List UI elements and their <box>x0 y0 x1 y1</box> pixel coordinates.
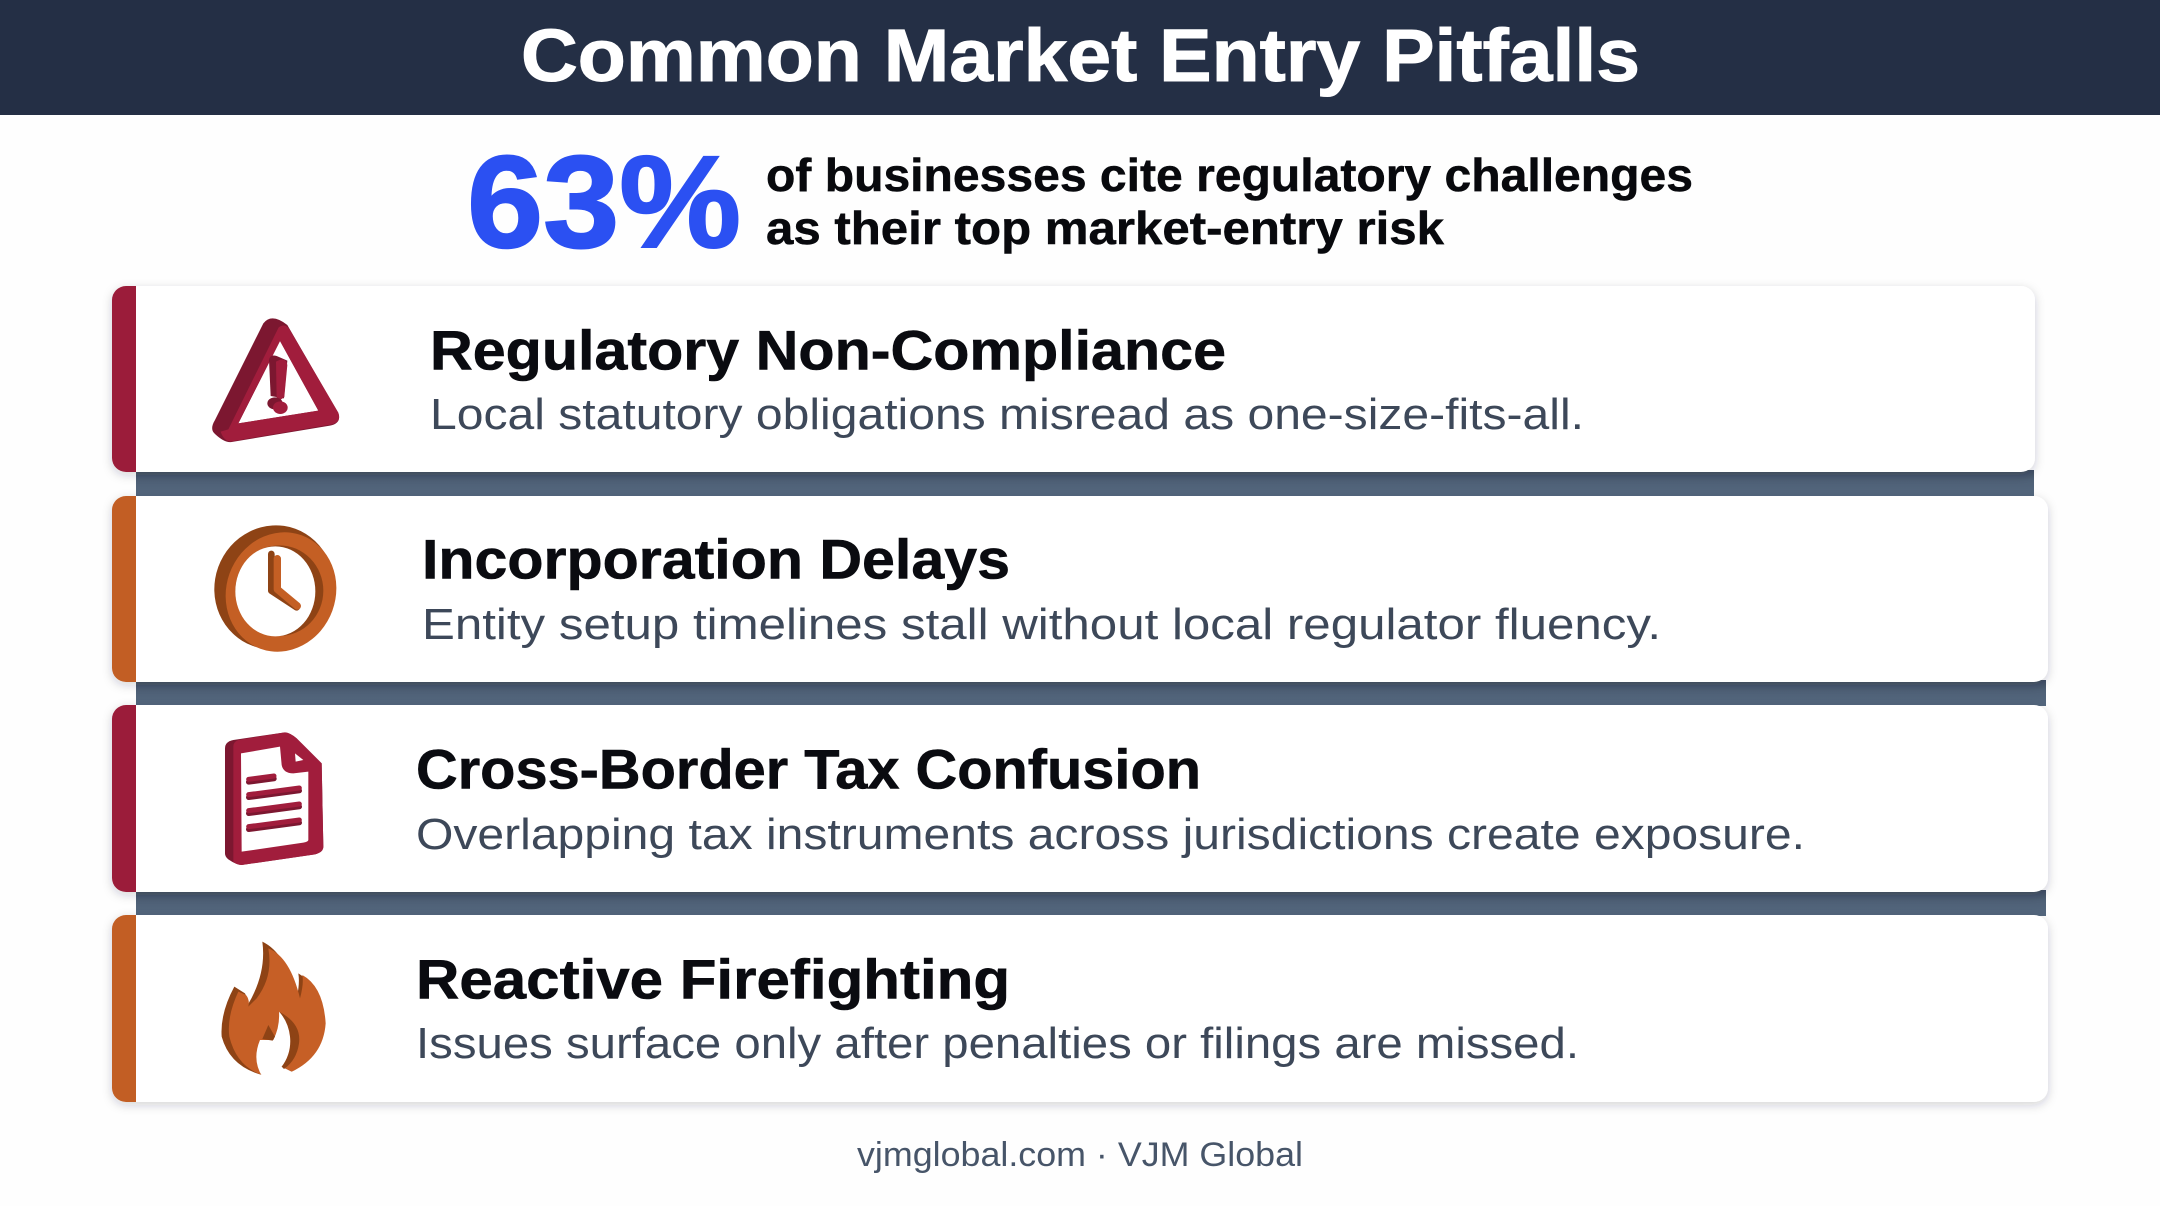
big stat number: 63% <box>467 128 741 275</box>
icon: flame <box>221 942 326 1077</box>
heading: Incorporation Delays <box>422 528 1010 590</box>
panel: cross-border tax confusion <box>112 705 2048 892</box>
stat description: as their top market-entry risk <box>766 202 1444 254</box>
description: Local statutory obligations misread as one-size-fits-all. <box>430 390 1584 439</box>
accent bar <box>112 915 136 1102</box>
description: Issues surface only after penalties or filings are missed. <box>416 1019 1579 1068</box>
heading: Regulatory Non-Compliance <box>430 318 1226 382</box>
description: Entity setup timelines stall without local regulator fluency. <box>422 600 1661 649</box>
icon: warning triangle <box>212 318 339 442</box>
stat description <box>766 149 1693 254</box>
header band <box>0 0 2160 115</box>
stat description: of businesses cite regulatory challenges <box>766 149 1693 201</box>
description: Overlapping tax instruments across jurisdictions create exposure. <box>416 810 1805 859</box>
accent bar <box>112 286 136 472</box>
panel: regulatory non-compliance <box>112 286 2035 472</box>
icon: document <box>225 732 323 865</box>
footer source: vjmglobal.com · VJM Global <box>857 1136 1303 1174</box>
accent bar <box>112 496 136 682</box>
heading: Cross-Border Tax Confusion <box>416 738 1201 800</box>
panel: incorporation delays <box>112 496 2048 682</box>
title: Common Market Entry Pitfalls <box>521 14 1640 97</box>
stat callout <box>467 128 1693 275</box>
heading: Reactive Firefighting <box>416 948 1010 1010</box>
icon: clock <box>197 508 353 667</box>
accent bar <box>112 705 136 892</box>
connector strips between cards <box>136 470 2046 916</box>
panel: reactive firefighting <box>112 915 2048 1102</box>
